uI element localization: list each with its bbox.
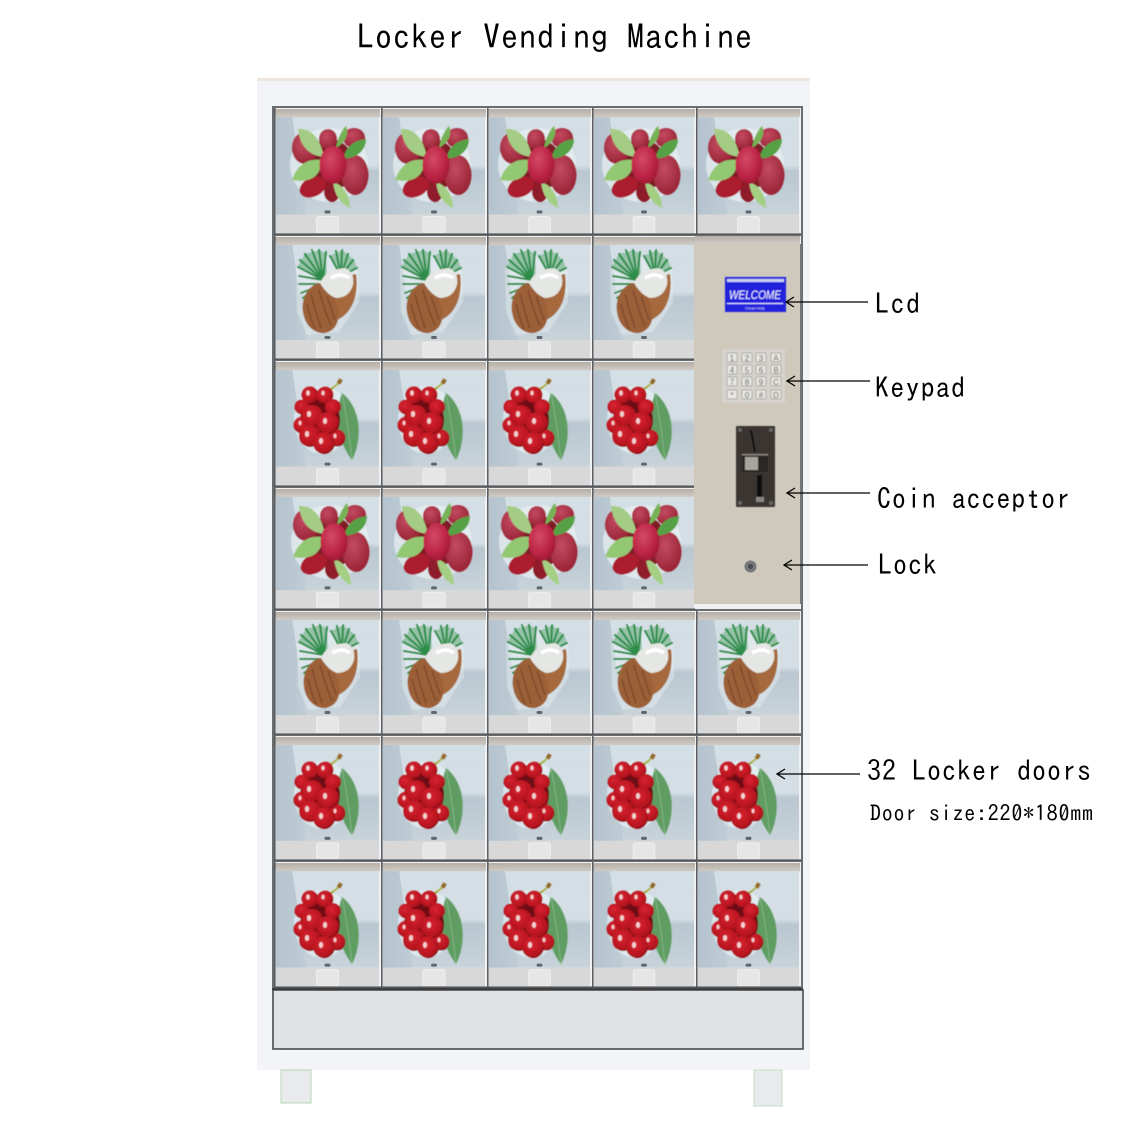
vending machine cabinet	[257, 78, 810, 1106]
locker door r5c5	[696, 611, 801, 735]
keypad: C	[773, 378, 779, 387]
keypad: D	[773, 391, 779, 400]
arrow: Lock	[784, 560, 868, 570]
label: Coin acceptor: Coin acceptor	[877, 485, 1070, 513]
lock	[744, 560, 756, 572]
locker door r1c5	[696, 108, 801, 235]
locker door r6c2	[381, 736, 487, 861]
locker door r4c2	[381, 488, 487, 610]
locker door r6c5	[696, 736, 801, 861]
locker door r2c4	[592, 236, 696, 360]
coin acceptor	[736, 426, 775, 507]
locker door r2c2	[381, 236, 487, 360]
keypad	[722, 349, 785, 403]
keypad: 3	[759, 354, 764, 363]
locker door r1c1	[274, 108, 381, 235]
locker door r6c1	[274, 736, 381, 861]
right leg	[754, 1070, 782, 1106]
locker door r6c3	[487, 736, 592, 861]
locker door r7c1	[274, 862, 381, 988]
keypad: 5	[745, 366, 750, 375]
title: Locker Vending Machine	[357, 20, 752, 54]
keypad: *	[730, 391, 734, 400]
label: Keypad: Keypad	[875, 374, 965, 402]
locker door r5c1	[274, 611, 381, 735]
locker door r7c4	[592, 862, 696, 988]
label: Lcd: Lcd	[875, 290, 920, 318]
LCD screen	[725, 277, 786, 312]
arrow: Coin acceptor	[787, 488, 870, 498]
control panel	[694, 236, 802, 609]
keypad: B	[773, 366, 779, 375]
left leg	[281, 1070, 311, 1103]
keypad: 9	[759, 378, 764, 387]
keypad: 0	[745, 391, 750, 400]
locker door r7c2	[381, 862, 487, 988]
locker door r5c4	[592, 611, 696, 735]
locker door r4c3	[487, 488, 592, 610]
locker door r3c3	[487, 361, 592, 487]
cabinet body	[257, 78, 810, 1070]
label: 32 Locker doors: 32 Locker doors	[867, 757, 1091, 785]
locker door r5c2	[381, 611, 487, 735]
locker door r2c3	[487, 236, 592, 360]
keypad: 4	[730, 366, 735, 375]
locker door r1c4	[592, 108, 696, 235]
label: Lock: Lock	[878, 551, 937, 579]
LCD screen: WELCOME	[729, 288, 782, 302]
locker door r4c4	[592, 488, 696, 610]
locker door r3c4	[592, 361, 696, 487]
locker door r7c5	[696, 862, 801, 988]
locker door r5c3	[487, 611, 592, 735]
keypad: #	[759, 391, 764, 400]
locker door r7c3	[487, 862, 592, 988]
arrow: 32 Locker doors	[777, 769, 860, 779]
locker door r1c3	[487, 108, 592, 235]
label: door size: Door size:220*180mm	[870, 802, 1093, 824]
keypad: 2	[745, 354, 750, 363]
locker door r3c2	[381, 361, 487, 487]
keypad: A	[773, 354, 779, 363]
arrow: Lcd	[786, 297, 868, 307]
arrow: Keypad	[787, 376, 870, 386]
locker door r6c4	[592, 736, 696, 861]
LCD screen: Clean Help	[745, 306, 766, 310]
locker door r4c1	[274, 488, 381, 610]
keypad: 6	[759, 366, 764, 375]
locker door r3c1	[274, 361, 381, 487]
keypad: 1	[730, 354, 735, 363]
bottom panel	[272, 988, 803, 1049]
keypad: 7	[730, 378, 735, 387]
locker door r2c1	[274, 236, 381, 360]
locker door r1c2	[381, 108, 487, 235]
keypad: 8	[745, 378, 750, 387]
